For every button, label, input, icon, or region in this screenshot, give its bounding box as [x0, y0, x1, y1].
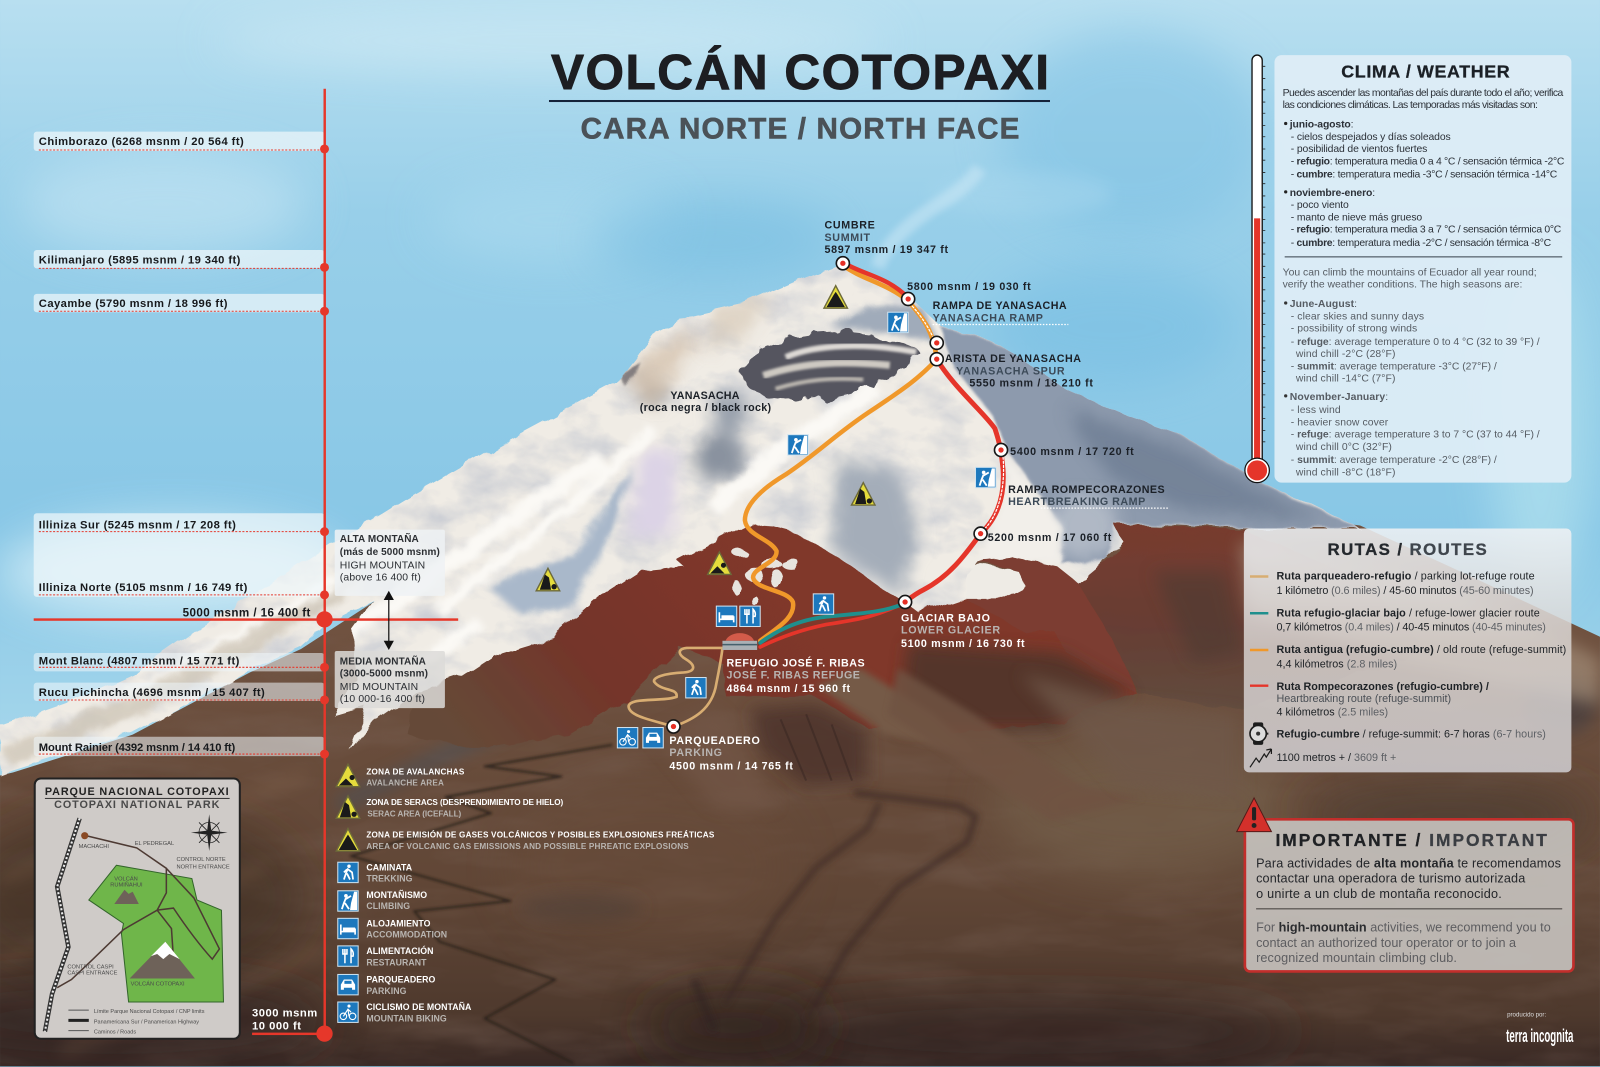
important text: Spanish: contactar una operadora de turismo autorizada: [1256, 872, 1526, 886]
mid mountain box: (10 000-16 400 ft): [340, 694, 425, 705]
weather text: English: verify the weather conditions. The high seasons are:: [1283, 280, 1522, 291]
label: 5400: 5400 msnm / 17 720 ft: [1010, 446, 1134, 458]
hazard and activity icons on mountain: [536, 286, 996, 748]
legend text: ACCOMMODATION: [366, 930, 447, 940]
mountain names: Cayambe (5790 msnm / 18 996 ft): [39, 298, 228, 310]
mountain names: [39, 136, 265, 754]
route descriptions: Ruta Rompecorazones (refugio-cumbre) /: [1277, 681, 1489, 693]
label: Yanasacha rock: [640, 390, 772, 414]
legend text: AREA OF VOLCANIC GAS EMISSIONS AND POSSIBLE PHREATIC EXPLOSIONS: [366, 842, 689, 851]
darker shadow strip: [1066, 408, 1327, 520]
tan snow: [622, 327, 704, 408]
weather text: English: - summit: average temperature -2°C (28°F) /: [1291, 455, 1497, 466]
label: Yanasacha rock: (roca negra / black rock): [640, 402, 772, 414]
label: Yanasacha spur: [945, 353, 1094, 390]
weather text: Spanish: - poco viento: [1291, 200, 1349, 211]
map labels: CONTROL CASPI: [67, 964, 114, 970]
weather text: Spanish: - cumbre: temperatura media -3°C / sensación térmica -14°C: [1291, 170, 1558, 181]
label: heartbreak ramp: HEARTBREAKING RAMP: [1008, 496, 1146, 508]
legend text: SERAC AREA (ICEFALL): [367, 809, 462, 818]
route descriptions: 4 kilómetros (2.5 miles): [1277, 706, 1388, 718]
label: parking: PARQUEADERO: [669, 735, 760, 747]
title: VOLCÁN COTOPAXI: [551, 44, 1049, 100]
ground texture: [151, 740, 1586, 1066]
map labels: CASPI ENTRANCE: [67, 970, 118, 976]
weather text: English: - refuge: average temperature 0 to 4 °C (32 to 39 °F) /: [1291, 337, 1540, 348]
high mountain box: HIGH MOUNTAIN: [340, 560, 425, 571]
lighter shadow patch: [1049, 493, 1118, 558]
important text: English: contact an authorized tour operator or to join a: [1256, 936, 1517, 950]
main red rock: [408, 521, 1137, 750]
important text: Spanish: [1256, 856, 1561, 901]
label: Yanasacha ramp: YANASACHA RAMP: [933, 312, 1044, 324]
mountain comparison boxes: [34, 132, 325, 756]
label: heartbreak ramp: [1008, 484, 1168, 508]
weather text: English: November-January:: [1290, 392, 1388, 403]
routes heading: RUTAS / ROUTES: [1328, 540, 1487, 559]
weather heading: CLIMA / WEATHER: [1341, 62, 1510, 82]
dark rock outcrop: [620, 363, 641, 386]
highway: [45, 818, 80, 1032]
important text: Spanish: Para actividades de alta montaña te recomendamos: [1256, 856, 1561, 870]
weather text: Spanish: - refugio: temperatura media 3 a 7 °C / sensación térmica 0°C: [1291, 225, 1562, 236]
thermometer: [1245, 55, 1269, 483]
route: red lower: [760, 602, 905, 647]
map labels: RUMIÑAHUI: [110, 882, 143, 889]
label: Yanasacha spur: 5550 msnm / 18 210 ft: [969, 378, 1094, 390]
buttress ribs: [653, 643, 1240, 1031]
double arrow: [384, 591, 394, 650]
legend text: MONTAÑISMO: [366, 890, 427, 900]
legend icons: [336, 764, 360, 1022]
map labels: CONTROL NORTE: [177, 857, 226, 863]
producer logo: producido por:: [1507, 1011, 1546, 1018]
route: red heartbreak: [905, 359, 1003, 602]
legend text: CICLISMO DE MONTAÑA: [366, 1002, 472, 1012]
label: heartbreak ramp: RAMPA ROMPECORAZONES: [1008, 484, 1165, 496]
weather text: Spanish: las condiciones climáticas. Las temporadas más visitadas son:: [1283, 100, 1538, 111]
white ridges: [122, 388, 878, 704]
winding road: [351, 745, 612, 1063]
weather text: English: wind chill -8°C (18°F): [1295, 467, 1396, 478]
white ridge by route: [974, 454, 1061, 571]
mountain names: Mont Blanc (4807 msnm / 15 771 ft): [39, 655, 240, 667]
brown mountain base: [0, 480, 1600, 1066]
high mountain box: ALTA MONTAÑA: [340, 532, 419, 545]
producer logo: [1506, 1011, 1574, 1046]
legend text: RESTAURANT: [366, 957, 427, 967]
mountain names: Rucu Pichincha (4696 msnm / 15 407 ft): [39, 687, 265, 699]
label: 5200: 5200 msnm / 17 060 ft: [988, 532, 1112, 544]
weather text: English: June-August:: [1290, 299, 1357, 310]
mid mountain box: [335, 651, 445, 708]
weather text: English: - clear skies and sunny days: [1291, 311, 1424, 322]
weather text: English: wind chill 0°C (32°F): [1295, 442, 1392, 453]
route descriptions: 4,4 kilómetros (2.8 miles): [1277, 658, 1397, 670]
label: parking: [669, 735, 794, 772]
weather text: Spanish: junio-agosto:: [1289, 120, 1353, 131]
label: Yanasacha spur: YANASACHA SPUR: [956, 365, 1065, 377]
right shadow face: [941, 327, 1360, 563]
subtitle: CARA NORTE / NORTH FACE: [581, 112, 1019, 145]
route descriptions: 0,7 kilómetros (0.4 miles) / 40-45 minutos (40-45 minutes): [1277, 622, 1546, 634]
roads: [57, 835, 219, 988]
label: lower glacier: 5100 msnm / 16 730 ft: [901, 638, 1025, 650]
legend text: CLIMBING: [366, 901, 410, 911]
route legend swatches: [1250, 577, 1268, 686]
important text: English: For high-mountain activities, we recommend you to: [1256, 921, 1551, 935]
map labels: VOLCÁN COTOPAXI: [131, 981, 185, 988]
map labels: [67, 832, 230, 1036]
legend: symbols: [336, 764, 715, 1023]
legend text: TREKKING: [366, 874, 413, 884]
upper right tan slope: [1240, 541, 1600, 704]
panel: national park map: [35, 779, 240, 1039]
label: parking: PARKING: [669, 747, 723, 759]
label: refuge: JOSÉ F. RIBAS REFUGE: [727, 669, 860, 682]
weather text: Spanish: - manto de nieve más grueso: [1291, 212, 1422, 223]
label: Yanasacha ramp: [933, 300, 1068, 324]
map labels: EL PEDREGAL: [135, 841, 174, 847]
label: Yanasacha ramp: RAMPA DE YANASACHA: [933, 300, 1067, 312]
yanasacha black rock: [741, 333, 923, 399]
crevasse blue: [488, 466, 635, 613]
label: refuge: [727, 656, 865, 695]
mountain labels: [640, 220, 1168, 772]
mountain names: Mount Rainier (4392 msnm / 14 410 ft): [39, 742, 236, 754]
weather text: English: - heavier snow cover: [1291, 417, 1389, 428]
weather text: English: [1283, 267, 1540, 478]
map labels: Caminos / Roads: [94, 1030, 136, 1036]
label: refuge: REFUGIO JOSÉ F. RIBAS: [727, 656, 865, 669]
mountain names: Chimborazo (6268 msnm / 20 564 ft): [39, 136, 244, 148]
label: lower glacier: LOWER GLACIER: [901, 625, 1001, 637]
route waypoints: [667, 257, 1008, 733]
legend text: MOUNTAIN BIKING: [366, 1013, 447, 1023]
panel: important: [1237, 798, 1573, 971]
panel: weather: [1274, 55, 1571, 483]
high mountain box: (más de 5000 msnm): [340, 547, 440, 558]
map labels: MACHACHI: [79, 844, 109, 850]
weather text: English: You can climb the mountains of Ecuador all year round;: [1283, 267, 1537, 278]
park area: [89, 865, 223, 1002]
legend text: CAMINATA: [366, 862, 413, 872]
3000 m marker: 3000 msnm: [252, 1007, 318, 1019]
5000 m line: [34, 606, 458, 628]
route descriptions: Refugio-cumbre / refuge-summit: 6-7 horas (6-7 hours): [1277, 729, 1546, 741]
serac shadow: [832, 459, 918, 597]
snow patches on red rock: [732, 548, 800, 607]
label: 5800: 5800 msnm / 19 030 ft: [907, 281, 1031, 293]
right red rock: [1077, 523, 1429, 710]
weather text: English: - refuge: average temperature 3 to 7 °C (37 to 44 °F) /: [1291, 430, 1540, 441]
mountain names: Illiniza Norte (5105 msnm / 16 749 ft): [39, 582, 248, 594]
route descriptions: 1 kilómetro (0.6 miles) / 45-60 minutos (45-60 minutes): [1277, 585, 1534, 597]
weather text: English: - less wind: [1291, 405, 1341, 416]
weather text: Spanish: - refugio: temperatura media 0 a 4 °C / sensación térmica -2°C: [1291, 156, 1565, 167]
panel: routes: [1244, 529, 1571, 772]
weather text: Spanish: [1283, 88, 1565, 249]
legend text: ZONA DE AVALANCHAS: [366, 767, 465, 776]
white glacier patch: [916, 563, 1027, 610]
map title: PARQUE NACIONAL COTOPAXI: [45, 786, 229, 798]
snow texture: [0, 268, 1344, 776]
mountain names: Kilimanjaro (5895 msnm / 19 340 ft): [39, 254, 241, 266]
legend text: ALIMENTACIÓN: [366, 945, 434, 956]
title rule: [549, 100, 1050, 102]
route: old orange: [745, 359, 937, 641]
map labels: Límite Parque Nacional Cotopaxi / CNP limits: [94, 1009, 205, 1015]
weather text: English: wind chill -2°C (28°F): [1295, 349, 1396, 360]
icon: watch: [1250, 722, 1268, 745]
mid mountain box: MID MOUNTAIN: [340, 682, 418, 693]
label: summit: 5897 msnm / 19 347 ft: [824, 244, 949, 256]
important text: English: recognized mountain climbing club.: [1256, 951, 1457, 965]
map title: [45, 786, 230, 811]
dashed leaders: [39, 150, 325, 754]
legend text: ZONA DE SERACS (DESPRENDIMIENTO DE HIELO): [366, 798, 564, 807]
route: teal: [760, 604, 903, 643]
important heading: IMPORTANTE / IMPORTANT: [1275, 830, 1547, 850]
right red rock shade: [1153, 571, 1243, 663]
route descriptions: [1277, 571, 1566, 764]
highway dashes: [45, 818, 80, 1032]
refuge building: [722, 633, 757, 650]
legend text: PARKING: [366, 986, 407, 996]
label: summit: CUMBRE: [824, 220, 876, 232]
weather text: Spanish: - cielos despejados y días soleados: [1291, 132, 1451, 143]
routes on mountain: [629, 262, 1004, 727]
legend text: PARQUEADERO: [366, 975, 436, 985]
weather text: Spanish: Puedes ascender las montañas del país durante todo el año; verifica: [1283, 88, 1564, 99]
weather divider: [1285, 256, 1562, 258]
route descriptions: Ruta refugio-glaciar bajo / refuge-lower glacier route: [1277, 607, 1540, 619]
volcanoes: [114, 890, 195, 979]
legend text: AVALANCHE AREA: [366, 779, 444, 788]
weather text: Spanish: noviembre-enero:: [1290, 188, 1375, 199]
label: Yanasacha rock: YANASACHA: [670, 390, 740, 402]
route descriptions: 1100 metros + / 3609 ft +: [1277, 752, 1396, 764]
altitude scale: [34, 89, 458, 1042]
weather text: Spanish: - cumbre: temperatura media -2°C / sensación térmica -8°C: [1291, 238, 1552, 249]
map labels: VOLCÁN: [114, 876, 138, 883]
dark ground shading: [0, 673, 1598, 1061]
compass rose: [191, 814, 228, 851]
important text: Spanish: o unirte a un club de montaña reconocido.: [1256, 887, 1502, 901]
high mountain box: (above 16 400 ft): [340, 573, 421, 584]
route: red summit: [843, 262, 908, 298]
label: lower glacier: GLACIAR BAJO: [901, 612, 991, 624]
label: parking: 4500 msnm / 14 765 ft: [669, 760, 794, 772]
grey left streak: [0, 571, 367, 765]
weather text: English: wind chill -14°C (7°F): [1295, 374, 1396, 385]
purple snow: [628, 450, 678, 540]
label: refuge: 4864 msnm / 15 960 ft: [727, 683, 851, 695]
route descriptions: Ruta antigua (refugio-cumbre) / old route (refuge-summit): [1277, 644, 1566, 656]
map labels: Panamericana Sur / Panamerican Highway: [94, 1019, 199, 1025]
ramp dotted line: [912, 306, 1004, 531]
icon: warning triangle: [1237, 798, 1271, 832]
weather text: Spanish: - posibilidad de vientos fuertes: [1291, 144, 1427, 155]
mountain painting: [0, 266, 1600, 1067]
mountain names: Illiniza Sur (5245 msnm / 17 208 ft): [39, 520, 236, 532]
weather text: English: - summit: average temperature -3°C (27°F) /: [1291, 361, 1497, 372]
weather text: English: - possibility of strong winds: [1291, 324, 1417, 335]
map labels: NORTH ENTRANCE: [177, 864, 230, 870]
important divider: [1256, 908, 1562, 909]
route descriptions: Ruta parqueadero-refugio / parking lot-refuge route: [1277, 571, 1535, 583]
high mountain box: [335, 530, 445, 596]
legend text: [366, 767, 715, 1023]
mid mountain box: (3000-5000 msnm): [340, 669, 428, 680]
important text: English: [1256, 921, 1551, 965]
grey snow patches: [637, 383, 748, 480]
route: orange top: [843, 265, 937, 359]
lobe red rock: [963, 557, 1137, 693]
legend text: ZONA DE EMISIÓN DE GASES VOLCÁNICOS Y POSIBLES EXPLOSIONES FREÁTICAS: [366, 829, 715, 840]
map title: COTOPAXI NATIONAL PARK: [54, 799, 220, 811]
3000 m marker: 10 000 ft: [252, 1021, 302, 1033]
axis line: [323, 89, 326, 1034]
snow cap: [0, 266, 1362, 776]
route: parking to refuge: [629, 648, 722, 727]
icon: elevation chart: [1250, 749, 1271, 767]
axis dots: [320, 144, 329, 759]
mid mountain box: MEDIA MONTAÑA: [340, 654, 426, 667]
shadow below peak: [832, 306, 937, 342]
3000 m marker: [252, 1007, 333, 1042]
label: Yanasacha spur: ARISTA DE YANASACHA: [945, 353, 1082, 365]
route descriptions: Heartbreaking route (refuge-summit): [1277, 693, 1451, 705]
label: lower glacier: [901, 612, 1025, 650]
label: summit: SUMMIT: [824, 232, 871, 244]
5000 m line: 5000 msnm / 16 400 ft: [183, 606, 311, 619]
label: summit: [824, 220, 949, 256]
legend text: ALOJAMIENTO: [366, 918, 431, 928]
